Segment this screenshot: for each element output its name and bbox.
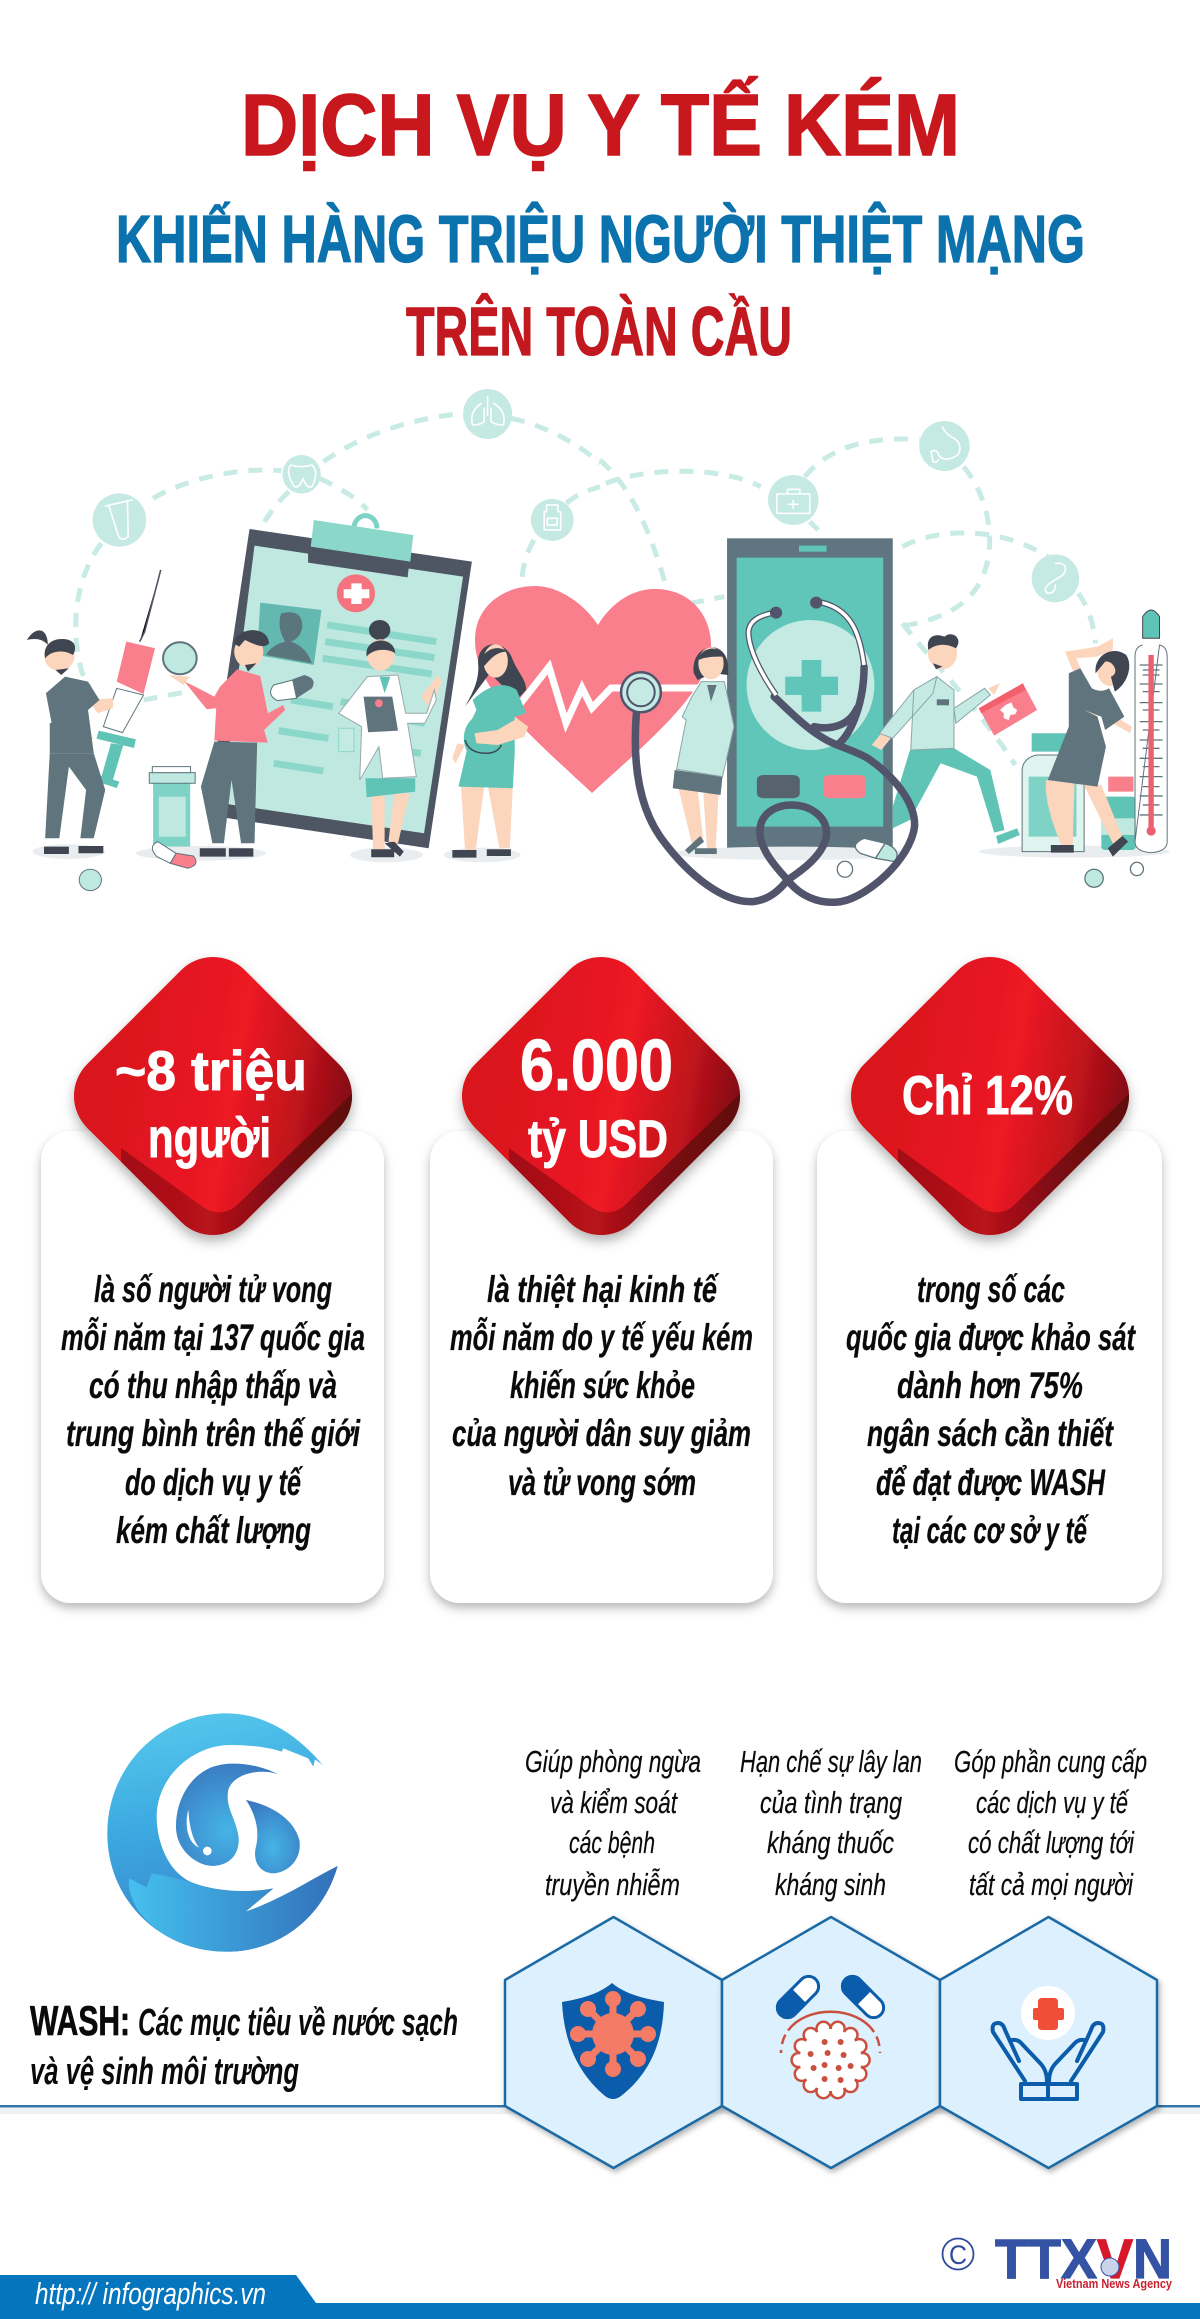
red diamond badge <box>455 956 747 1248</box>
caption: antibiotic resistance <box>740 1744 922 1902</box>
caption: antibiotic resistance: của tình trạng <box>760 1785 902 1820</box>
ground shadows right <box>673 846 1170 860</box>
agency name: Vietnam News Agency <box>1056 2276 1173 2291</box>
phone with medical cross <box>727 538 893 851</box>
caption: quality care <box>954 1744 1147 1902</box>
caption: prevention <box>525 1744 701 1902</box>
description <box>450 1269 753 1503</box>
icon: capsules and resistant bacteria <box>773 1972 888 2098</box>
syringe <box>92 570 161 788</box>
description <box>846 1269 1136 1551</box>
capsules <box>773 1972 888 2022</box>
card <box>817 1131 1162 1603</box>
hexagon 1 <box>505 1917 722 2168</box>
caption: quality care: tất cả mọi người <box>969 1867 1134 1902</box>
dashed connecting lines and icon bubbles, left <box>76 389 600 700</box>
panel: statistic 3, only 12 percent <box>817 938 1162 1603</box>
description: do dịch vụ y tế <box>125 1462 303 1503</box>
description: tại các cơ sở y tế <box>892 1510 1089 1551</box>
description: mỗi năm tại 137 quốc gia <box>61 1317 365 1358</box>
badge text <box>115 1039 307 1169</box>
icon: WASH water logo <box>107 1713 338 1952</box>
icon: shield with virus <box>562 1983 664 2099</box>
caption: prevention: các bệnh <box>569 1825 655 1860</box>
caption: antibiotic resistance: kháng sinh <box>775 1867 886 1902</box>
illustration: medical team around clipboard, heart and phone <box>27 389 1170 902</box>
WASH definition text: và vệ sinh môi trường <box>30 2051 299 2093</box>
medicine bottle <box>149 767 195 847</box>
badge text: tỷ USD <box>528 1110 668 1169</box>
caption: quality care: có chất lượng tới <box>968 1825 1135 1860</box>
ground shadows left <box>33 844 520 862</box>
badge text: người <box>148 1106 271 1169</box>
horizontal rule behind hexagons <box>0 2105 1200 2114</box>
copyright and TTXVN logo <box>942 2227 1173 2291</box>
badge text: Chỉ 12% <box>902 1064 1073 1126</box>
figure: pregnant woman <box>452 644 528 858</box>
figure: doctor with tablet <box>339 620 442 857</box>
description: trong số các <box>917 1269 1065 1310</box>
title line 3: TRÊN TOÀN CẦU <box>406 293 792 370</box>
description: của người dân suy giảm <box>452 1413 751 1454</box>
caption: prevention: và kiểm soát <box>550 1785 678 1820</box>
panel: statistic 2, 6000 billion USD <box>430 938 773 1603</box>
large bottle <box>1022 733 1084 852</box>
thermometer <box>1135 610 1167 853</box>
badge text: 6.000 <box>520 1026 673 1106</box>
copyright symbol <box>942 2238 974 2270</box>
figure: medic running with first aid kit <box>872 634 1037 844</box>
description: có thu nhập thấp và <box>89 1365 337 1406</box>
clipboard with patient record <box>207 516 472 848</box>
caption: antibiotic resistance: Hạn chế sự lây lan <box>740 1744 922 1779</box>
pill <box>79 869 101 891</box>
WASH definition text <box>30 1997 458 2093</box>
stethoscope <box>621 597 915 902</box>
people and objects, left side <box>27 570 528 891</box>
capsule on floor <box>152 842 196 868</box>
description: dành hơn 75% <box>897 1365 1083 1406</box>
footer bar with URL: http:// infographics.vn <box>35 2276 266 2311</box>
title line 1: DỊCH VỤ Y TẾ KÉM <box>241 77 960 174</box>
description: khiến sức khỏe <box>510 1365 695 1406</box>
description <box>61 1269 365 1551</box>
description: kém chất lượng <box>116 1510 311 1551</box>
red diamond badge <box>67 956 359 1248</box>
protective dashed arc <box>781 2012 880 2053</box>
people and objects, right side <box>621 597 1170 902</box>
footer bar with URL <box>0 2275 1200 2319</box>
icon: hands holding red cross <box>993 1986 1103 2099</box>
figure: nurse holding syringe <box>27 630 113 854</box>
description: là số người tử vong <box>94 1269 332 1310</box>
figure: woman with fever <box>1046 638 1132 857</box>
title <box>116 77 1085 370</box>
hexagon row <box>505 1917 1157 2168</box>
heart with ECG line <box>475 586 711 793</box>
badge text <box>520 1026 673 1169</box>
bacterium <box>792 2022 870 2098</box>
caption: antibiotic resistance: kháng thuốc <box>767 1825 894 1860</box>
copyright symbol: C <box>949 2240 967 2270</box>
red diamond badge <box>844 956 1136 1248</box>
figure: man holding capsule <box>163 630 314 857</box>
TTXVN wordmark: TTXVN <box>995 2227 1172 2290</box>
dashed connecting lines and icon bubbles, right <box>600 421 1096 765</box>
card <box>41 1131 384 1603</box>
globe mark <box>1101 2258 1119 2276</box>
hexagon 2 <box>722 1917 940 2168</box>
WASH definition text: Các mục tiêu về nước sạch <box>138 2002 458 2044</box>
hexagon 3 <box>940 1917 1157 2168</box>
caption: prevention: Giúp phòng ngừa <box>525 1744 701 1779</box>
benefit captions <box>525 1744 1147 1902</box>
card <box>430 1131 773 1603</box>
description: là thiệt hại kinh tế <box>487 1269 720 1310</box>
figure: doctor standing by phone <box>673 647 734 854</box>
description: mỗi năm do y tế yếu kém <box>450 1317 753 1358</box>
description: trung bình trên thế giới <box>66 1413 361 1454</box>
caption: quality care: các dịch vụ y tế <box>976 1785 1130 1820</box>
small bottle <box>1101 777 1136 850</box>
panel: statistic 1, 8 million people <box>41 938 384 1603</box>
description: và tử vong sớm <box>508 1462 696 1503</box>
scattered pills <box>837 838 1143 887</box>
badge text: ~8 triệu <box>115 1039 307 1102</box>
caption: prevention: truyền nhiễm <box>545 1867 680 1902</box>
WASH definition text: WASH: <box>30 1997 130 2044</box>
